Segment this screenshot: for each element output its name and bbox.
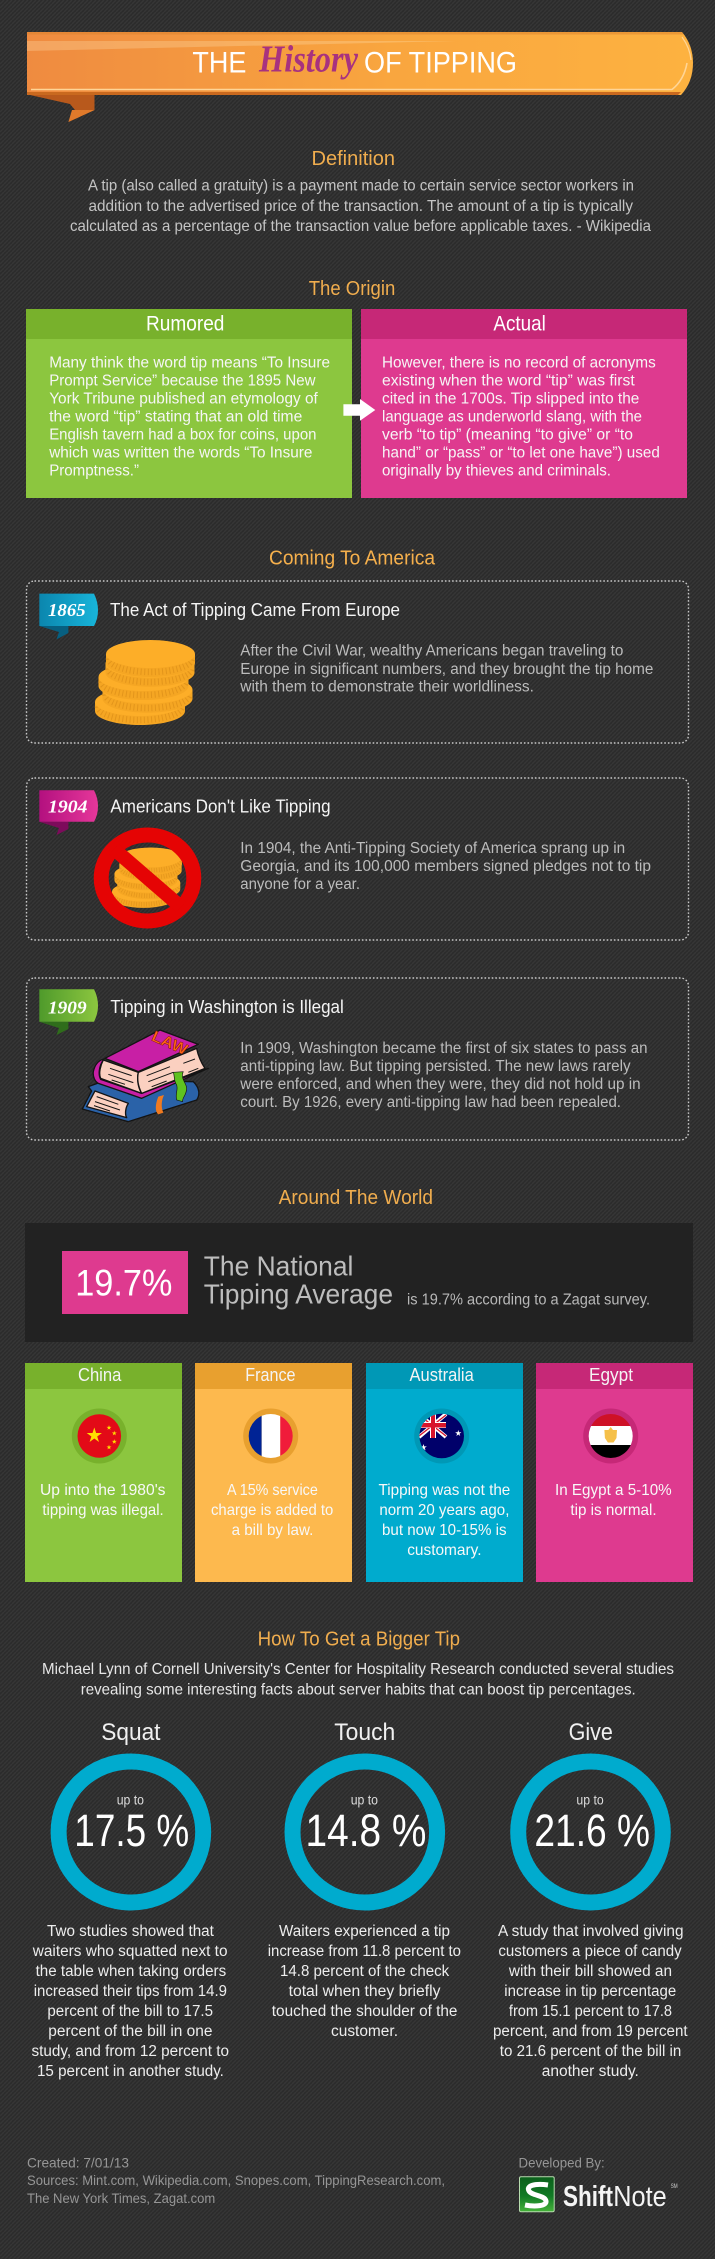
actual text: cited in the 1700s. Tip slipped into the <box>382 391 639 408</box>
touch text: increase from 11.8 percent to <box>268 1943 461 1960</box>
definition text: calculated as a percentage of the transaction value before applicable taxes. - Wikipedia <box>70 218 651 235</box>
1909 text: In 1909, Washington became the first of six states to pass an <box>240 1040 648 1057</box>
panel: national tipping average <box>25 1223 693 1342</box>
heading: dislike of tipping: Americans Don't Like Tipping <box>110 797 331 817</box>
squat text: Two studies showed that <box>47 1923 215 1940</box>
heading: european origin: The Act of Tipping Came From Europe <box>110 600 400 620</box>
title text: History <box>258 38 358 80</box>
actual text: language as underworld slang, with the <box>382 409 642 426</box>
national average label: The National <box>204 1251 353 1282</box>
rumored text: York Tribune published an etymology of <box>49 391 318 408</box>
china text <box>40 1482 166 1519</box>
ribbon: 1904: 1904 <box>48 796 88 816</box>
footer: developer <box>518 2154 678 2213</box>
1909 text: were enforced, and when they were, they did not hold up in <box>239 1076 641 1093</box>
give text: another study. <box>542 2063 639 2080</box>
give text: percent, and from 19 percent <box>493 2023 688 2040</box>
stat: 19.7%: 19.7% <box>75 1262 172 1303</box>
title text: THE <box>192 47 246 80</box>
touch text: 14.8 percent of the check <box>280 1963 449 1980</box>
ring: 17.5%: up to <box>117 1793 144 1808</box>
squat text: study, and from 12 percent to <box>32 2043 229 2060</box>
france text: a bill by law. <box>232 1522 313 1539</box>
footer: credits and sources: Created: 7/01/13 <box>27 2154 129 2170</box>
rumored text: Promptness.” <box>49 463 139 480</box>
give text: increase in tip percentage <box>504 1983 676 2000</box>
china text: tipping was illegal. <box>42 1502 164 1519</box>
france text: charge is added to <box>211 1502 333 1519</box>
shiftnote wordmark: SM <box>671 2184 678 2190</box>
touch text: touched the shoulder of the <box>272 2003 457 2020</box>
panel: 1865 <box>26 581 688 743</box>
egypt text: In Egypt a 5-10% <box>555 1482 672 1499</box>
1904 text: Georgia, and its 100,000 members signed pledges not to tip <box>240 858 651 875</box>
ribbon: 1865 <box>39 594 98 639</box>
column: touch <box>268 1719 461 2040</box>
arrow: rumored to actual <box>343 399 375 421</box>
national average label <box>204 1251 393 1309</box>
definition text <box>70 178 651 235</box>
panel: rumored: Rumored <box>146 313 224 336</box>
australia text: Tipping was not the <box>378 1482 510 1499</box>
the origin heading: The Origin <box>309 278 395 300</box>
1904 text: anyone for a year. <box>240 876 360 893</box>
ribbon: 1865: 1865 <box>48 600 86 620</box>
ring: 14.8%: up to <box>351 1793 378 1808</box>
title banner <box>27 32 693 122</box>
bigger tip intro: revealing some interesting facts about server habits that can boost tip percentages. <box>81 1682 636 1699</box>
squat text: percent of the bill in one <box>48 2023 212 2040</box>
france text: A 15% service <box>227 1482 318 1499</box>
touch text <box>268 1923 461 2040</box>
icon: australia flag <box>414 1408 469 1464</box>
rumored text: the word “tip” stating that an old time <box>49 409 302 426</box>
actual text: verb “to tip” (meaning “to give” or “to <box>382 427 633 444</box>
coming to america heading: Coming To America <box>269 547 436 569</box>
national average label: Tipping Average <box>204 1278 393 1309</box>
actual text: existing when the word “tip” was first <box>382 373 635 390</box>
rumored text <box>48 355 330 480</box>
panel: 1904 <box>26 778 688 940</box>
1865 text: After the Civil War, wealthy Americans began traveling to <box>240 643 623 660</box>
bigger tip intro: Michael Lynn of Cornell University's Center for Hospitality Research conducted several studies <box>42 1661 674 1678</box>
squat text: percent of the bill to 17.5 <box>47 2003 213 2020</box>
card: egypt: Egypt <box>589 1365 633 1385</box>
heading: illegal in washington: Tipping in Washington is Illegal <box>110 997 344 1017</box>
rumored text: Many think the word tip means “To Insure <box>49 355 330 372</box>
australia text: norm 20 years ago, <box>379 1502 509 1519</box>
panel: rumored <box>26 309 352 498</box>
rumored text: Prompt Service” because the 1895 New <box>49 373 316 390</box>
actual text: hand” or “pass” or “to let one have”) used <box>382 445 660 462</box>
ring: 21.6%: 21.6 % <box>534 1805 650 1856</box>
footer: credits and sources: The New York Times, Zagat.com <box>27 2190 215 2206</box>
card: egypt <box>536 1363 693 1582</box>
1909 text <box>239 1040 647 1111</box>
actual text: However, there is no record of acronyms <box>382 355 656 372</box>
ring: 21.6% <box>518 1762 663 1902</box>
icon: coin stack <box>95 640 195 725</box>
bigger tip heading: How To Get a Bigger Tip <box>258 1629 460 1651</box>
title text <box>192 38 517 80</box>
card: australia <box>366 1363 523 1582</box>
touch text: customer. <box>331 2023 398 2040</box>
actual text <box>382 355 660 480</box>
panel: actual <box>361 309 687 498</box>
give text <box>493 1923 688 2080</box>
1904 text <box>240 840 651 893</box>
shiftnote wordmark: Shift <box>563 2181 613 2213</box>
column: give <box>493 1719 688 2080</box>
icon: no coins sign <box>101 835 194 921</box>
icon: law books <box>82 1028 208 1122</box>
around the world heading: Around The World <box>279 1187 433 1209</box>
australia text: but now 10-15% is <box>382 1522 507 1539</box>
touch text: total when they briefly <box>289 1983 441 2000</box>
france text <box>211 1482 333 1539</box>
ribbon: 1904 <box>39 790 98 835</box>
footer: credits and sources: Sources: Mint.com, Wikipedia.com, Snopes.com, TippingResearch.com, <box>27 2172 445 2188</box>
1865 text: with them to demonstrate their worldliness. <box>239 679 534 696</box>
1865 text <box>239 643 653 696</box>
give text: with their bill showed an <box>508 1963 672 1980</box>
ring: 17.5% <box>59 1762 203 1902</box>
bigger tip intro <box>42 1661 674 1699</box>
card: france <box>195 1363 352 1582</box>
card: china: China <box>78 1365 122 1385</box>
egypt text <box>555 1482 672 1519</box>
touch text: Waiters experienced a tip <box>279 1923 450 1940</box>
panel: actual: Actual <box>493 313 546 336</box>
1909 text: anti-tipping law. But tipping persisted. The new laws rarely <box>240 1058 631 1075</box>
ring: 21.6%: up to <box>576 1793 604 1808</box>
ring: 17.5%: 17.5 % <box>74 1805 189 1856</box>
1904 text: In 1904, the Anti-Tipping Society of America sprang up in <box>240 840 625 857</box>
shiftnote wordmark <box>563 2181 678 2213</box>
stat: 19.7% <box>62 1251 188 1314</box>
column: squat: Squat <box>101 1719 161 1746</box>
column: touch: Touch <box>334 1719 395 1746</box>
rumored text: which was written the words “To Insure <box>48 445 312 462</box>
ring: 14.8%: 14.8 % <box>306 1805 426 1856</box>
icon: france flag <box>243 1408 298 1464</box>
banner ribbon tail <box>30 95 94 122</box>
rumored text: English tavern had a box for coins, upon <box>49 427 316 444</box>
australia text: customary. <box>407 1542 482 1559</box>
squat text: 15 percent in another study. <box>37 2063 224 2080</box>
shiftnote wordmark: Note <box>613 2181 667 2213</box>
definition text: A tip (also called a gratuity) is a payment made to certain service sector workers in <box>88 178 634 195</box>
1909 text: court. By 1926, every anti-tipping law had been repealed. <box>240 1094 621 1111</box>
footer: credits and sources <box>27 2154 445 2206</box>
squat text <box>32 1923 229 2080</box>
column: give: Give <box>569 1719 613 1746</box>
footer: developer: Developed By: <box>518 2154 605 2170</box>
panel: 1909 <box>26 978 688 1140</box>
zagat note: is 19.7% according to a Zagat survey. <box>407 1291 650 1308</box>
give text: from 15.1 percent to 17.8 <box>509 2003 672 2020</box>
title text: OF TIPPING <box>364 47 517 80</box>
ribbon: 1909 <box>39 989 98 1035</box>
squat text: waiters who squatted next to <box>32 1943 227 1960</box>
icon: shiftnote logo <box>520 2177 554 2212</box>
actual text: originally by thieves and criminals. <box>382 463 611 480</box>
squat text: increased their tips from 14.9 <box>34 1983 227 2000</box>
column: squat <box>32 1719 229 2080</box>
card: france: France <box>245 1365 296 1385</box>
egypt text: tip is normal. <box>570 1502 657 1519</box>
1865 text: Europe in significant numbers, and they brought the tip home <box>240 661 653 678</box>
ring: 14.8% <box>292 1762 437 1902</box>
ribbon: 1909: 1909 <box>48 997 87 1017</box>
china text: Up into the 1980's <box>40 1482 166 1499</box>
give text: to 21.6 percent of the bill in <box>500 2043 681 2060</box>
give text: customers a piece of candy <box>498 1943 682 1960</box>
definition text: addition to the advertised price of the transaction. The amount of a tip is typically <box>88 198 633 215</box>
squat text: the table when taking orders <box>36 1963 226 1980</box>
icon: china flag <box>72 1408 127 1464</box>
give text: A study that involved giving <box>498 1923 684 1940</box>
card: australia: Australia <box>410 1365 475 1385</box>
card: china <box>25 1363 182 1582</box>
icon: egypt flag <box>583 1408 638 1464</box>
banner body <box>27 32 693 95</box>
definition heading: Definition <box>312 148 395 170</box>
icon: law books: LAW <box>149 1028 191 1059</box>
australia text <box>378 1482 510 1559</box>
